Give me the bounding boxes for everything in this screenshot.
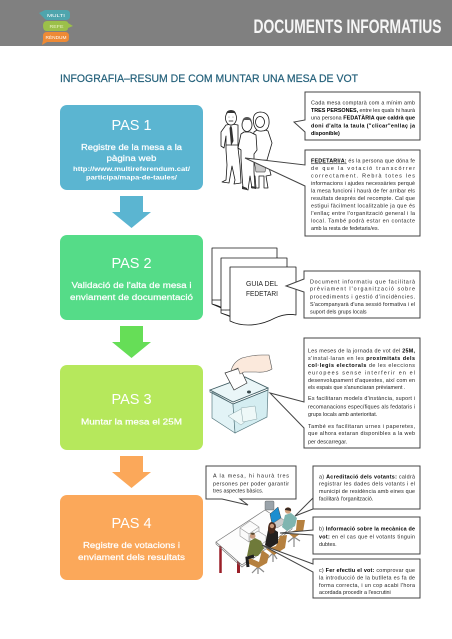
callout text: b) Informació sobre la mecànica de <box>319 526 415 532</box>
icon: guide documents stack <box>212 248 296 325</box>
callout text: europees sense interferir en el <box>308 370 415 376</box>
logo: REFE <box>50 24 64 29</box>
callout text: grups locals amb anterioritat. <box>308 412 377 418</box>
step 1 description: http://www.multireferendum.cat/ <box>73 166 190 173</box>
callout text: tres aspectes bàsics. <box>213 488 263 494</box>
callout text: doni d'alta la taula ("clicar"enllaç ja <box>311 124 416 130</box>
document label: FEDETARI <box>246 291 278 298</box>
icon: three people line art <box>221 110 272 190</box>
document label <box>246 281 278 298</box>
callout text: l'enllaç entre l'organització general i la <box>311 211 415 217</box>
callout text: local. També podrà estar en contacte <box>311 218 415 224</box>
step 4 label: PAS 4 <box>111 516 152 532</box>
arrow: step 1 to 2 <box>112 196 151 228</box>
callout text: forma correcta, i un cop acabi l'hora <box>319 583 415 589</box>
callout text <box>310 280 415 316</box>
callout text: municipi de residència amb eines que <box>319 489 415 495</box>
arrow: step 2 to 3 <box>112 326 151 358</box>
callout text: amb la resta de fedetaris/es. <box>311 226 379 232</box>
callout text: s'instal·laran en les proximitats dels <box>308 356 415 362</box>
callout: guide description <box>286 271 420 318</box>
step 4 description: Registre de votacions i <box>83 540 180 550</box>
callout: set up the table <box>270 338 420 448</box>
callout text: la mesa funcioni i haurà de fer arribar els <box>311 188 415 194</box>
header band <box>0 0 452 46</box>
logo: RÈNDUM <box>46 34 67 40</box>
callout text <box>319 526 415 548</box>
callout text: A la mesa, hi haurà tres <box>213 474 289 480</box>
callout text <box>319 474 415 502</box>
callout text: la introducció de la butlleta es fa de <box>319 576 415 582</box>
callout text: una persona FEDATÀRIA que caldrà que <box>311 114 415 122</box>
step 1 description: pàgina web <box>106 153 157 163</box>
callout text: informacions i ajudes necessàries perquè <box>311 181 415 187</box>
callout text: els espais que s'anunciaran prèviament . <box>308 385 406 391</box>
callout text <box>311 100 416 137</box>
icon: polling table scene <box>216 501 305 574</box>
callout text: resultats després del recompte. Cal que <box>311 196 415 202</box>
callout text: Les meses de la jornada de vot del 25M, <box>308 348 416 354</box>
callout text: a) Acreditació dels votants: caldrà <box>319 474 415 480</box>
callout text: vot: en el cas que el votants tinguin <box>319 534 415 540</box>
step 2 description <box>70 280 193 302</box>
callout text: disponible) <box>311 131 340 137</box>
callout: a) voter accreditation <box>295 466 420 516</box>
callout: three people at the table <box>206 466 296 505</box>
callout: b) voting information <box>280 517 420 554</box>
callout text: col·legis electorals de les eleccions <box>308 363 415 369</box>
icon: ballot box with hand <box>210 355 272 433</box>
callout text: procediments i gestió d'incidències. <box>310 294 415 300</box>
callout text: desenvolupament d'aquestes, així com en <box>308 378 415 384</box>
callout text <box>308 348 416 446</box>
callout text: registrar les dades dels votants i el <box>319 482 415 488</box>
callout: fedetari definition <box>245 150 420 236</box>
logo: MULTI <box>47 13 65 18</box>
callout text: que alhora estaran disponibles a la web <box>308 431 415 437</box>
callout text: correctament. Rebrà totes les <box>311 174 415 180</box>
logo <box>39 10 73 45</box>
step 1 description: participa/mapa-de-taules/ <box>86 174 177 182</box>
callout text: per descarregar. <box>308 440 347 446</box>
step 4 description <box>78 540 185 562</box>
callout text: dubtes. <box>319 542 337 548</box>
callout text: TRES PERSONES, entre les quals hi haurà <box>311 108 415 114</box>
callout text: recomanacions específiques als fedataris i <box>308 404 415 410</box>
callout text: prèviament l'organització sobre <box>310 286 415 292</box>
arrow: step 3 to 4 <box>112 456 151 488</box>
panel: step 3 <box>60 365 203 450</box>
callout text <box>311 158 415 232</box>
step 1 description: Registre de la mesa a la <box>81 142 182 152</box>
callout text: També es facilitaran urnes i paperetes, <box>308 424 416 430</box>
step 2 description: Validació de l'alta de mesa i <box>72 280 192 290</box>
step 2 description: enviament de documentació <box>70 292 193 302</box>
step 1 description <box>73 142 190 182</box>
page heading: INFOGRAFIA–RESUM DE COM MUNTAR UNA MESA DE VOT <box>60 73 358 85</box>
panel: step 4 <box>60 495 203 580</box>
step 4 description: enviament dels resultats <box>78 552 185 562</box>
callout text: Document informatiu que facilitarà <box>310 280 415 286</box>
callout: three people minimum <box>294 92 420 140</box>
step 3 label: PAS 3 <box>111 392 152 408</box>
callout text: Cada mesa comptarà com a mínim amb <box>311 100 415 106</box>
callout text <box>213 474 289 494</box>
callout text: de que la votació transcórrer <box>311 166 415 172</box>
panel: step 1 <box>60 105 203 190</box>
panel: step 2 <box>60 235 203 320</box>
callout text: facilitarà l'organització. <box>319 496 373 502</box>
callout text <box>319 568 415 596</box>
callout text: acordada procedir a l'escrutini <box>319 590 391 596</box>
callout text: persones per poder garantir <box>213 482 289 488</box>
callout: c) casting the vote <box>262 545 420 598</box>
callout text: suport dels grups locals <box>310 310 367 316</box>
step 2 label: PAS 2 <box>111 256 152 272</box>
callout text: c) Fer efectiu el vot: comprovar que <box>319 568 415 574</box>
callout text: Es facilitaran models d'instància, suport i <box>308 396 415 402</box>
callout text: S'acompanyarà d'una sessió formativa i el <box>310 302 415 308</box>
callout text: estigui fàcilment localitzable ja que és <box>311 204 415 210</box>
callout text: FEDETARI/A: és la persona que dóna fe <box>311 158 415 164</box>
document label: GUIA DEL <box>246 281 278 288</box>
step 3 description: Muntar la mesa el 25M <box>81 416 182 426</box>
step 1 label: PAS 1 <box>111 118 152 134</box>
